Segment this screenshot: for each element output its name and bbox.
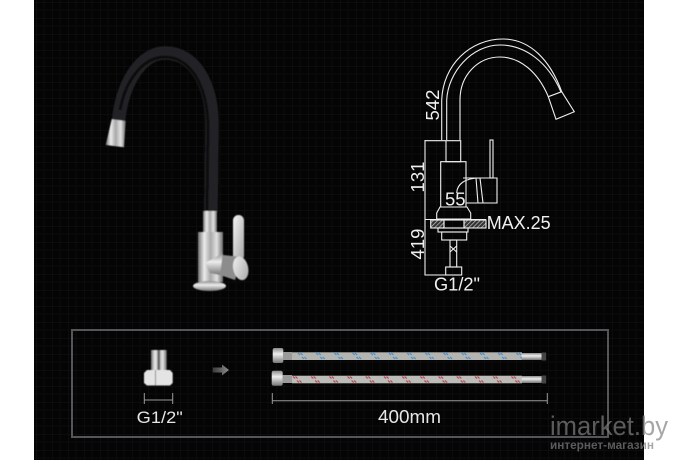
- label: 400mm: 400mm: [378, 407, 441, 427]
- dimension label: 55: 55: [445, 189, 466, 210]
- dimension label: 542: 542: [422, 90, 443, 120]
- label: G1/2 fitting: G1/2": [137, 408, 183, 427]
- dimension label: 419: 419: [407, 229, 428, 259]
- mounting assembly outline: [425, 207, 486, 275]
- bracket: fitting width: [144, 393, 173, 404]
- dimension label: G1/2 drawing: G1/2": [434, 274, 480, 295]
- body and lever outline: [425, 140, 497, 207]
- technical drawing: faucet side view: [425, 39, 574, 275]
- watermark: imarket.by: imarket.by: [550, 411, 668, 441]
- watermark: imarket.by: интернет-магазин: [550, 438, 654, 452]
- panel: accessories frame: [72, 330, 608, 437]
- bracket: hose length: [272, 393, 547, 404]
- icon: G1/2 adapter fitting: [144, 350, 173, 386]
- hose with red marks: [272, 371, 546, 386]
- spout outline: [442, 39, 574, 140]
- photo: faucet with black flexible spout: [106, 53, 251, 291]
- arrow: [213, 364, 229, 376]
- dimension label: 131: 131: [407, 162, 428, 192]
- dimension label: MAX.25: MAX.25: [487, 212, 551, 233]
- hose with blue marks: [273, 348, 546, 363]
- dimension lines: [425, 140, 446, 275]
